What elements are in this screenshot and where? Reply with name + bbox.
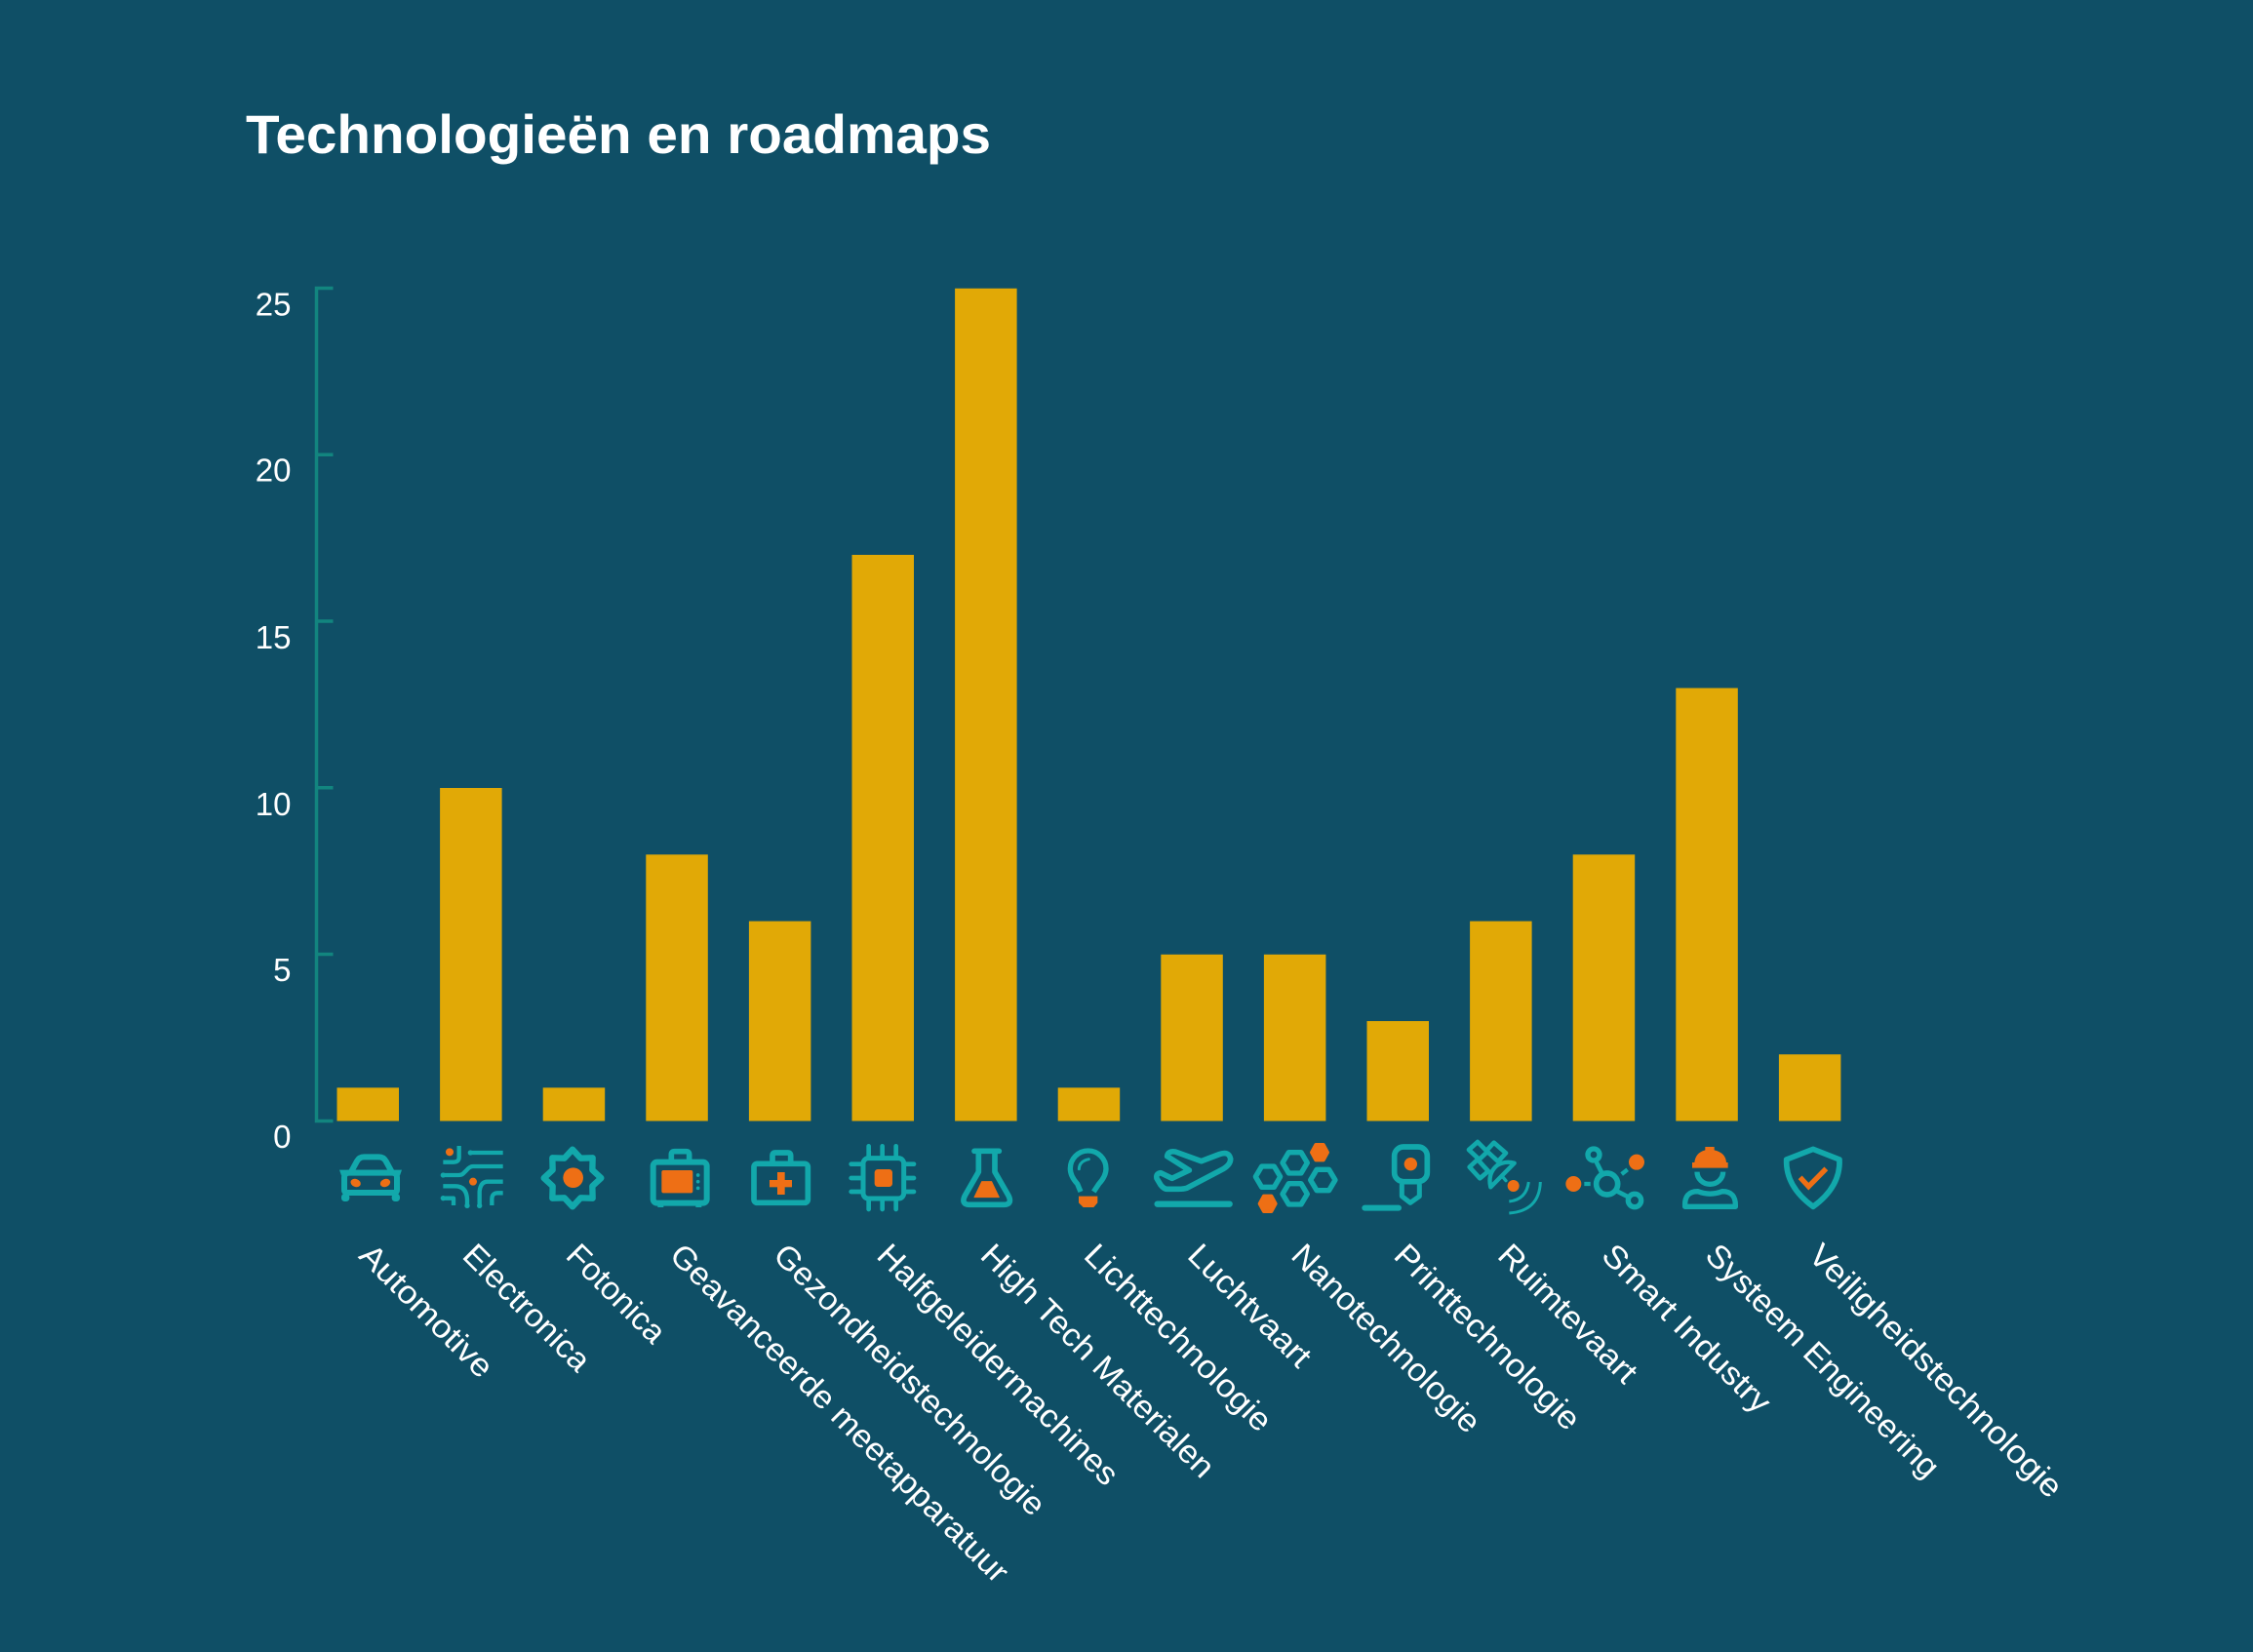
icon: engineer	[1685, 1147, 1735, 1206]
label: Fotonica: Fotonica	[560, 1237, 674, 1351]
icon: smart network	[1565, 1149, 1644, 1207]
icon: shield	[1787, 1149, 1839, 1206]
icon: light star	[544, 1150, 601, 1206]
bar: Luchtvaart 5	[1161, 955, 1223, 1121]
label: Systeem Engineering: Systeem Engineering	[1699, 1237, 1947, 1484]
title: Technologieën en roadmaps	[246, 103, 991, 165]
icon: light bulb	[1070, 1151, 1106, 1207]
icon: circuit	[441, 1146, 503, 1208]
category labels	[353, 1237, 2071, 1590]
y axis	[256, 287, 334, 1155]
icon: hexagons	[1255, 1145, 1335, 1211]
icon: measuring device	[653, 1152, 707, 1207]
icon: car	[339, 1157, 402, 1201]
label: High Tech Materialen: High Tech Materialen	[974, 1237, 1222, 1484]
bar: Smart Industry 8	[1573, 854, 1635, 1121]
icon: flask	[964, 1151, 1009, 1204]
label: Gezondheidstechnologie: Gezondheidstechnologie	[767, 1237, 1053, 1522]
bar: Nanotechnologie 5	[1264, 955, 1325, 1121]
bar: Fotonica 1	[543, 1087, 605, 1121]
y axis: 10	[256, 786, 291, 822]
bar: Electronica 10	[440, 788, 502, 1121]
label: Geavanceerde meetapparatuur: Geavanceerde meetapparatuur	[663, 1237, 1016, 1590]
icon: chip	[851, 1146, 914, 1209]
y axis: 25	[256, 287, 291, 322]
bar: High Tech Materialen 25	[955, 289, 1017, 1121]
bar: Halfgeleidermachines 17	[852, 555, 914, 1121]
y axis: 0	[273, 1119, 291, 1155]
label: Lichttechnologie: Lichttechnologie	[1078, 1237, 1280, 1438]
bar: Geavanceerde meetapparatuur 8	[646, 854, 708, 1121]
bar: Automotive 1	[337, 1087, 399, 1121]
bar: Printtechnologie 3	[1367, 1021, 1429, 1121]
y axis: 15	[256, 619, 291, 655]
bar: Veiligheidstechnologie 2	[1779, 1054, 1840, 1121]
bar chart	[337, 289, 1840, 1121]
bar: Systeem Engineering 13	[1676, 688, 1738, 1121]
label: Luchtvaart: Luchtvaart	[1181, 1237, 1319, 1374]
y axis: 20	[256, 452, 291, 488]
label: Veiligheidstechnologie: Veiligheidstechnologie	[1802, 1237, 2071, 1505]
label: Automotive: Automotive	[353, 1237, 501, 1385]
y axis: 5	[273, 952, 291, 988]
icon: airplane	[1157, 1152, 1231, 1204]
bar: Gezondheidstechnologie 6	[749, 922, 810, 1121]
bar: Ruimtevaart 6	[1470, 922, 1532, 1121]
bar: Lichttechnologie 1	[1058, 1087, 1120, 1121]
label: Smart Industry: Smart Industry	[1596, 1237, 1779, 1420]
label: Nanotechnologie: Nanotechnologie	[1285, 1237, 1488, 1439]
icon: satellite	[1469, 1142, 1540, 1213]
label: Printtechnologie: Printtechnologie	[1388, 1237, 1588, 1437]
label: Halfgeleidermachines: Halfgeleidermachines	[870, 1237, 1126, 1492]
label: Electronica: Electronica	[456, 1237, 599, 1379]
label: Ruimtevaart: Ruimtevaart	[1491, 1237, 1645, 1390]
icon row	[339, 1142, 1839, 1213]
icon: 3D print nozzle	[1364, 1147, 1427, 1208]
icon: medical case	[754, 1153, 808, 1202]
